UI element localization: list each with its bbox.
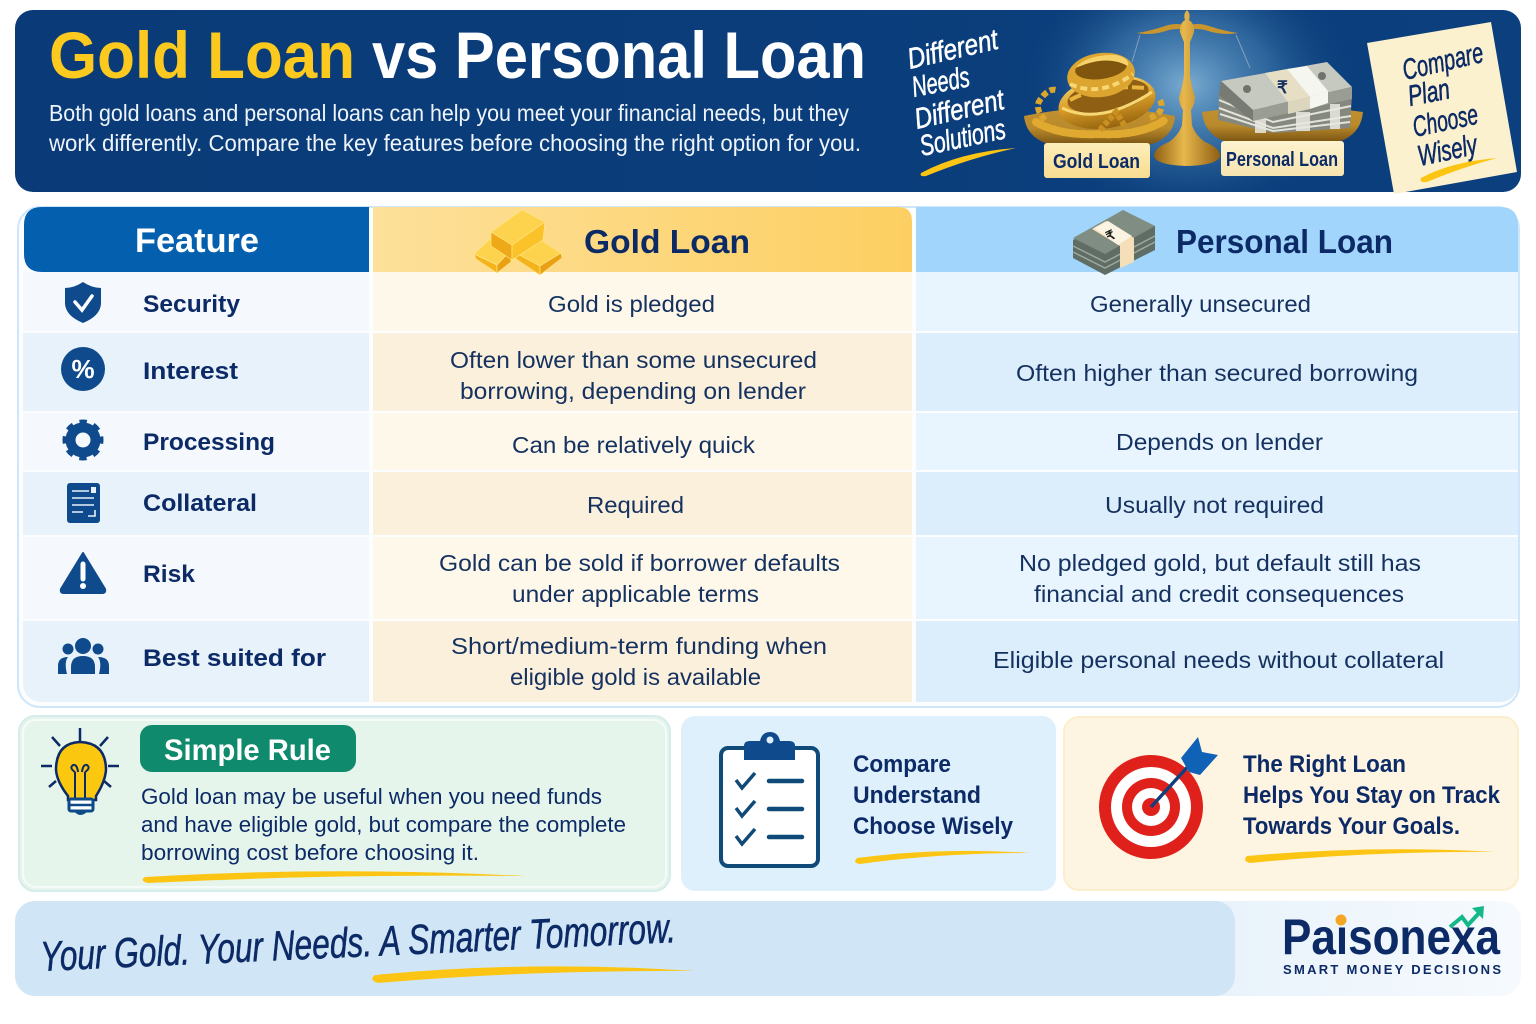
row: Risk [61, 550, 1421, 607]
sticky note [1367, 22, 1517, 194]
icon: document [67, 483, 100, 523]
right loan text: The Right Loan [1243, 751, 1406, 778]
right loan text: Helps You Stay on Track [1243, 782, 1501, 809]
sticky note: Choose [1410, 99, 1481, 144]
right loan text: Towards Your Goals. [1243, 813, 1460, 840]
footer slogan: Your Gold. Your Needs. A Smarter Tomorrow. [39, 904, 677, 980]
row: Interest: Often lower than some unsecured [450, 347, 817, 373]
title: Gold Loan [49, 18, 355, 92]
row: Best suited for: Short/medium-term funding when [451, 633, 827, 659]
handwritten slogan: Different [911, 84, 1009, 136]
row: Interest: Interest [143, 358, 238, 385]
compare text: Compare [853, 751, 951, 778]
icon: light bulb [41, 728, 119, 815]
handwritten slogan [904, 24, 1016, 176]
compare text: Understand [853, 782, 981, 809]
label: Personal Loan [1221, 141, 1344, 176]
column header: Personal Loan [916, 207, 1518, 275]
icon: gold bars [474, 210, 562, 275]
title: vs Personal Loan [372, 18, 866, 92]
panel: simple rule [19, 716, 670, 891]
right loan text [1243, 751, 1501, 840]
row: Collateral: Required [587, 492, 684, 518]
icon: percent: % [71, 354, 95, 384]
column header: Feature [24, 207, 369, 272]
row: Collateral [67, 483, 1324, 523]
footer strip [15, 901, 1521, 996]
row: Interest: Often higher than secured borrowing [1016, 360, 1418, 386]
label: Gold Loan [1044, 143, 1150, 178]
logo: Paisonexa: SMART MONEY DECISIONS [1283, 962, 1501, 977]
row: Risk: No pledged gold, but default still has [1019, 550, 1421, 576]
header banner [15, 10, 1521, 194]
balance scale [1132, 10, 1250, 166]
handwritten slogan: Solutions [917, 113, 1009, 163]
icon: warning triangle [61, 553, 105, 593]
sticky note: Wisely [1415, 129, 1481, 173]
row: Processing [65, 422, 1323, 458]
column header: Gold Loan: Gold Loan [584, 223, 750, 260]
icon: money bundle: ₹ [1103, 227, 1118, 244]
row: Interest [61, 347, 1418, 404]
money stack on bowl: ₹ [1277, 78, 1288, 97]
comparison table [18, 207, 1519, 707]
icon: shield [65, 282, 101, 323]
intro text [48, 100, 861, 156]
row: Security: Generally unsecured [1090, 291, 1311, 317]
rule text: Gold loan may be useful when you need funds [141, 784, 602, 809]
icon: people [58, 638, 109, 674]
intro text: work differently. Compare the key features before choosing the right option for you. [48, 130, 861, 156]
row: Security: Gold is pledged [548, 291, 715, 317]
icon: target with dart [1099, 737, 1218, 859]
row: Collateral: Collateral [143, 490, 257, 517]
icon: clipboard checklist [721, 732, 818, 866]
logo: Paisonexa: Paisonexa [1282, 909, 1501, 965]
row: Processing: Processing [143, 429, 275, 456]
column header: Feature: Feature [135, 222, 259, 260]
icon: percent [61, 347, 105, 391]
row: Security [65, 282, 1311, 323]
icon: gear [65, 422, 101, 458]
title [49, 18, 866, 92]
row: Best suited for [58, 633, 1444, 690]
row: Best suited for: eligible gold is available [510, 664, 761, 690]
intro text: Both gold loans and personal loans can help you meet your financial needs, but they [49, 100, 849, 126]
column header: Gold Loan [373, 207, 912, 275]
rule text: and have eligible gold, but compare the complete [141, 812, 626, 837]
sticky note: Compare [1399, 37, 1486, 87]
money stack on bowl [1202, 62, 1363, 145]
row: Best suited for: Best suited for [143, 645, 326, 672]
row: Processing: Can be relatively quick [512, 432, 755, 458]
row: Risk: Risk [143, 561, 196, 588]
sticky note: Plan [1405, 73, 1453, 113]
panel: compare understand choose [681, 716, 1056, 891]
label: Personal Loan: Personal Loan [1226, 149, 1338, 171]
row: Best suited for: Eligible personal needs without collateral [993, 647, 1444, 673]
compare text [853, 751, 1014, 840]
label: Gold Loan: Gold Loan [1053, 151, 1140, 173]
panel: right loan [1064, 717, 1518, 890]
handwritten slogan: Different [904, 24, 1003, 76]
icon: money bundle [1073, 210, 1155, 275]
row: Risk: under applicable terms [512, 581, 759, 607]
row: Risk: Gold can be sold if borrower defaults [439, 550, 840, 576]
handwritten slogan: Needs [909, 61, 972, 104]
gold jewellery on bowl [1024, 48, 1175, 148]
row: Security: Security [143, 291, 241, 318]
row: Risk: financial and credit consequences [1034, 581, 1404, 607]
badge: Simple Rule: Simple Rule [164, 734, 331, 767]
badge: Simple Rule [140, 725, 356, 772]
row: Processing: Depends on lender [1116, 429, 1323, 455]
table rows [23, 272, 1518, 704]
row: Interest: borrowing, depending on lender [460, 378, 806, 404]
rule text [141, 784, 626, 865]
compare text: Choose Wisely [853, 813, 1014, 840]
column header: Personal Loan: Personal Loan [1176, 223, 1393, 260]
row: Collateral: Usually not required [1105, 492, 1324, 518]
rule text: borrowing cost before choosing it. [141, 840, 479, 865]
